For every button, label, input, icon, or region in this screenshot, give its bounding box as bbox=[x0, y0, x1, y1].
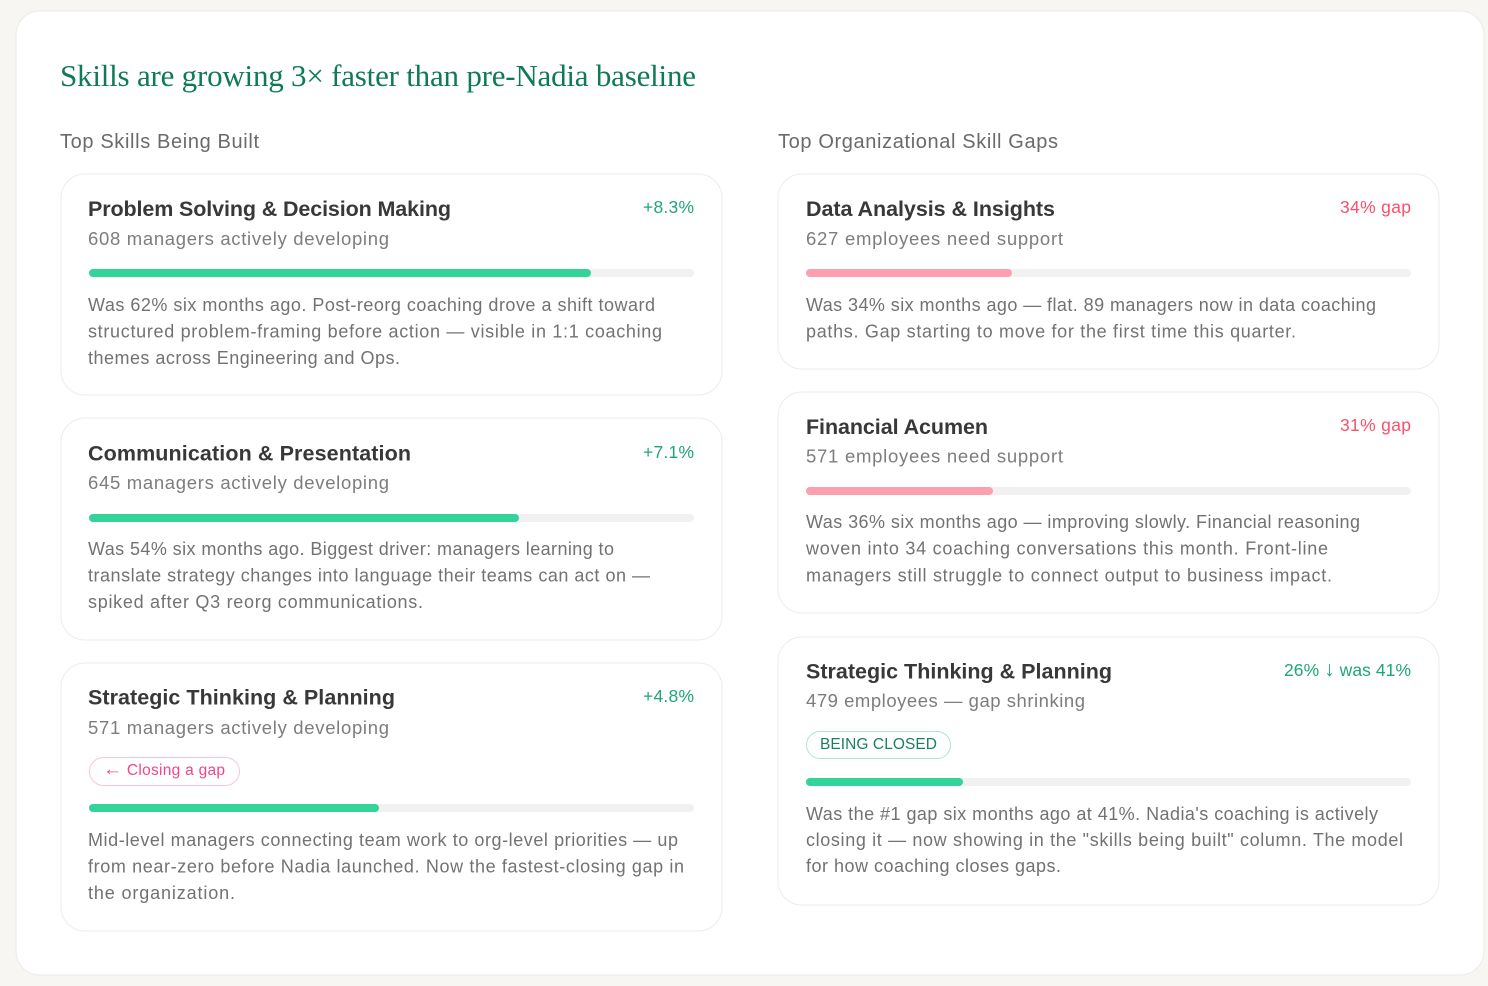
panel: Financial Acumen card: Financial Acumen bbox=[806, 415, 988, 439]
panel: Strategic Thinking skill card: the organization. bbox=[88, 883, 235, 903]
panel: Strategic Thinking gap card: for how coaching closes gaps. bbox=[806, 856, 1061, 876]
panel: Communication card: translate strategy changes into language their teams can act on — bbox=[88, 566, 650, 586]
panel: Strategic Thinking gap card: 26% ↓ was 41% bbox=[1284, 658, 1411, 681]
panel: Financial Acumen card: Was 36% six months ago — improving slowly. Financial reasoning bbox=[806, 512, 1360, 532]
panel: Strategic Thinking gap card: closing it — now showing in the "skills being built" column. The model bbox=[806, 830, 1403, 850]
panel: Strategic Thinking gap card: BEING CLOSED bbox=[820, 736, 937, 753]
panel: Strategic Thinking skill card: Mid-level managers connecting team work to org-level priorities — up bbox=[88, 830, 678, 850]
panel: Communication card bbox=[61, 418, 722, 640]
column heading: skill gaps: Top Organizational Skill Gaps bbox=[778, 131, 1058, 153]
panel: Strategic Thinking skill card: Strategic Thinking & Planning bbox=[88, 686, 395, 710]
panel: Strategic Thinking skill card: from near-zero before Nadia launched. Now the fastest-closing gap in bbox=[88, 856, 684, 876]
panel: Communication card: +7.1% bbox=[643, 442, 694, 462]
panel: Communication card: 645 managers actively developing bbox=[88, 472, 389, 493]
panel: Problem Solving card: 608 managers actively developing bbox=[88, 228, 389, 249]
panel: Problem Solving card: themes across Engineering and Ops. bbox=[88, 348, 400, 368]
panel: Communication card: Was 54% six months ago. Biggest driver: managers learning to bbox=[88, 539, 614, 559]
panel: Data Analysis card: Data Analysis & Insights bbox=[806, 197, 1055, 221]
panel: Financial Acumen card: 31% gap bbox=[1340, 415, 1411, 435]
panel: Financial Acumen card: managers still struggle to connect output to business impact. bbox=[806, 566, 1332, 586]
panel: Problem Solving card bbox=[61, 174, 722, 395]
panel: Strategic Thinking skill card: +4.8% bbox=[643, 686, 694, 706]
panel: Problem Solving card: +8.3% bbox=[643, 197, 694, 217]
panel: Data Analysis card: paths. Gap starting to move for the first time this quarter. bbox=[806, 322, 1296, 342]
panel: Strategic Thinking gap card: Was the #1 gap six months ago at 41%. Nadia's coaching is actively bbox=[806, 804, 1378, 824]
panel: Data Analysis card: Was 34% six months ago — flat. 89 managers now in data coaching bbox=[806, 295, 1376, 315]
panel: Data Analysis card bbox=[778, 174, 1439, 369]
panel: Problem Solving card: Problem Solving & Decision Making bbox=[88, 197, 451, 221]
panel: Strategic Thinking gap card: Strategic Thinking & Planning bbox=[806, 660, 1112, 684]
panel: Strategic Thinking gap card bbox=[778, 637, 1439, 905]
panel: Strategic Thinking gap card: 479 employees — gap shrinking bbox=[806, 690, 1085, 711]
panel: Communication card: Communication & Presentation bbox=[88, 442, 411, 466]
panel: Communication card: spiked after Q3 reorg communications. bbox=[88, 592, 423, 612]
panel: Financial Acumen card: 571 employees need support bbox=[806, 446, 1063, 466]
panel: Data Analysis card: 627 employees need support bbox=[806, 228, 1063, 249]
title: Skills are growing 3× faster than pre-Nadia baseline bbox=[60, 58, 696, 93]
panel: Problem Solving card: Was 62% six months ago. Post-reorg coaching drove a shift toward bbox=[88, 295, 655, 315]
panel: Problem Solving card: structured problem-framing before action — visible in 1:1 coaching bbox=[88, 322, 662, 342]
panel: Data Analysis card: 34% gap bbox=[1340, 197, 1411, 217]
panel: Strategic Thinking skill card: ← Closing a gap bbox=[103, 759, 225, 780]
panel: Strategic Thinking skill card: 571 managers actively developing bbox=[88, 717, 389, 738]
panel: Financial Acumen card bbox=[778, 392, 1439, 613]
column heading: skills built: Top Skills Being Built bbox=[60, 131, 259, 153]
panel: Financial Acumen card: woven into 34 coaching conversations this month. Front-line bbox=[805, 538, 1328, 558]
panel: Strategic Thinking skill card bbox=[61, 663, 722, 931]
